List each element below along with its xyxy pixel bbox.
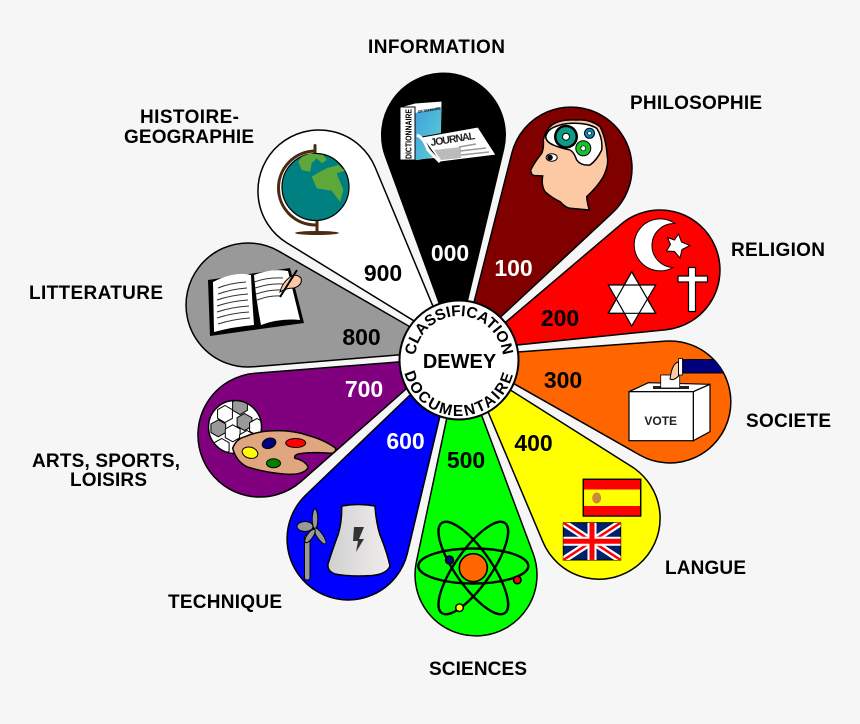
label: histoire-geographie: GEOGRAPHIE (124, 127, 254, 148)
number 900: 900 (364, 260, 402, 286)
icon: crescent and star (634, 219, 690, 271)
number 500: 500 (447, 447, 485, 473)
panel: 800 litterature (186, 243, 413, 367)
label: langue: LANGUE (665, 558, 746, 579)
center circle: classification dewey documentaire: CLASSIFICATION (406, 305, 514, 354)
icon: atom (418, 513, 528, 623)
label: philosophie: PHILOSOPHIE (630, 93, 762, 114)
icon: cross (678, 268, 708, 312)
label: information: INFORMATION (368, 37, 505, 58)
label: arts, sports, loisirs (32, 451, 180, 491)
label: histoire-geographie: HISTOIRE- (140, 107, 239, 128)
number 700: 700 (345, 376, 383, 402)
icon: dictionary and newspaper (400, 101, 496, 162)
label: technique: TECHNIQUE (168, 592, 282, 613)
panel: 400 langue (487, 388, 660, 579)
number 800: 800 (342, 324, 381, 350)
label: sciences: SCIENCES (429, 659, 527, 680)
panel: 900 histoire-geographie (258, 130, 434, 323)
icon: open book and quill (208, 268, 304, 336)
number 600: 600 (386, 428, 425, 454)
icon: head with gears (531, 120, 608, 210)
icon: dictionary and newspaper: DICTIONNAIRE (418, 106, 442, 114)
number 300: 300 (544, 367, 582, 393)
number 200: 200 (541, 305, 579, 331)
panel: 100 philosophie (473, 107, 632, 320)
icon: ballot box (629, 358, 725, 441)
panel: 300 societe (511, 341, 731, 463)
icon: British flag (563, 523, 621, 560)
icon: painter's palette (233, 431, 336, 474)
label: histoire-geographie (124, 107, 254, 148)
icon: globe (279, 144, 349, 235)
number 000: 000 (431, 240, 469, 266)
center circle: classification dewey documentaire: DOCUMENTAIRE (404, 370, 513, 416)
number 400: 400 (514, 430, 553, 456)
panel: 000 information (382, 74, 505, 307)
icon: soccer ball (208, 398, 264, 456)
icon: cooling tower (328, 504, 390, 576)
icon: star of David (608, 272, 656, 326)
label: religion: RELIGION (731, 240, 825, 261)
icon: ballot box: VOTE (644, 414, 677, 428)
icon: dictionary and newspaper: JOURNAL (430, 130, 476, 149)
icon: Spanish flag (583, 479, 641, 516)
label: societe: SOCIETE (746, 411, 831, 432)
label: litterature: LITTERATURE (29, 283, 163, 304)
icon: wind turbine (297, 509, 328, 580)
panel: 500 sciences (415, 412, 537, 636)
panel: 200 religion (503, 210, 720, 345)
label: arts, sports, loisirs: LOISIRS (70, 470, 147, 491)
number 100: 100 (494, 255, 533, 281)
center circle: classification dewey documentaire: DEWEY (423, 351, 497, 373)
panel: 600 technique (287, 392, 441, 600)
panel: 700 arts sports loisirs (198, 362, 409, 497)
label: arts, sports, loisirs: ARTS, SPORTS, (32, 451, 180, 472)
icon: dictionary and newspaper: DICTIONNAIRE (404, 109, 414, 159)
center circle: classification dewey documentaire (398, 300, 520, 420)
